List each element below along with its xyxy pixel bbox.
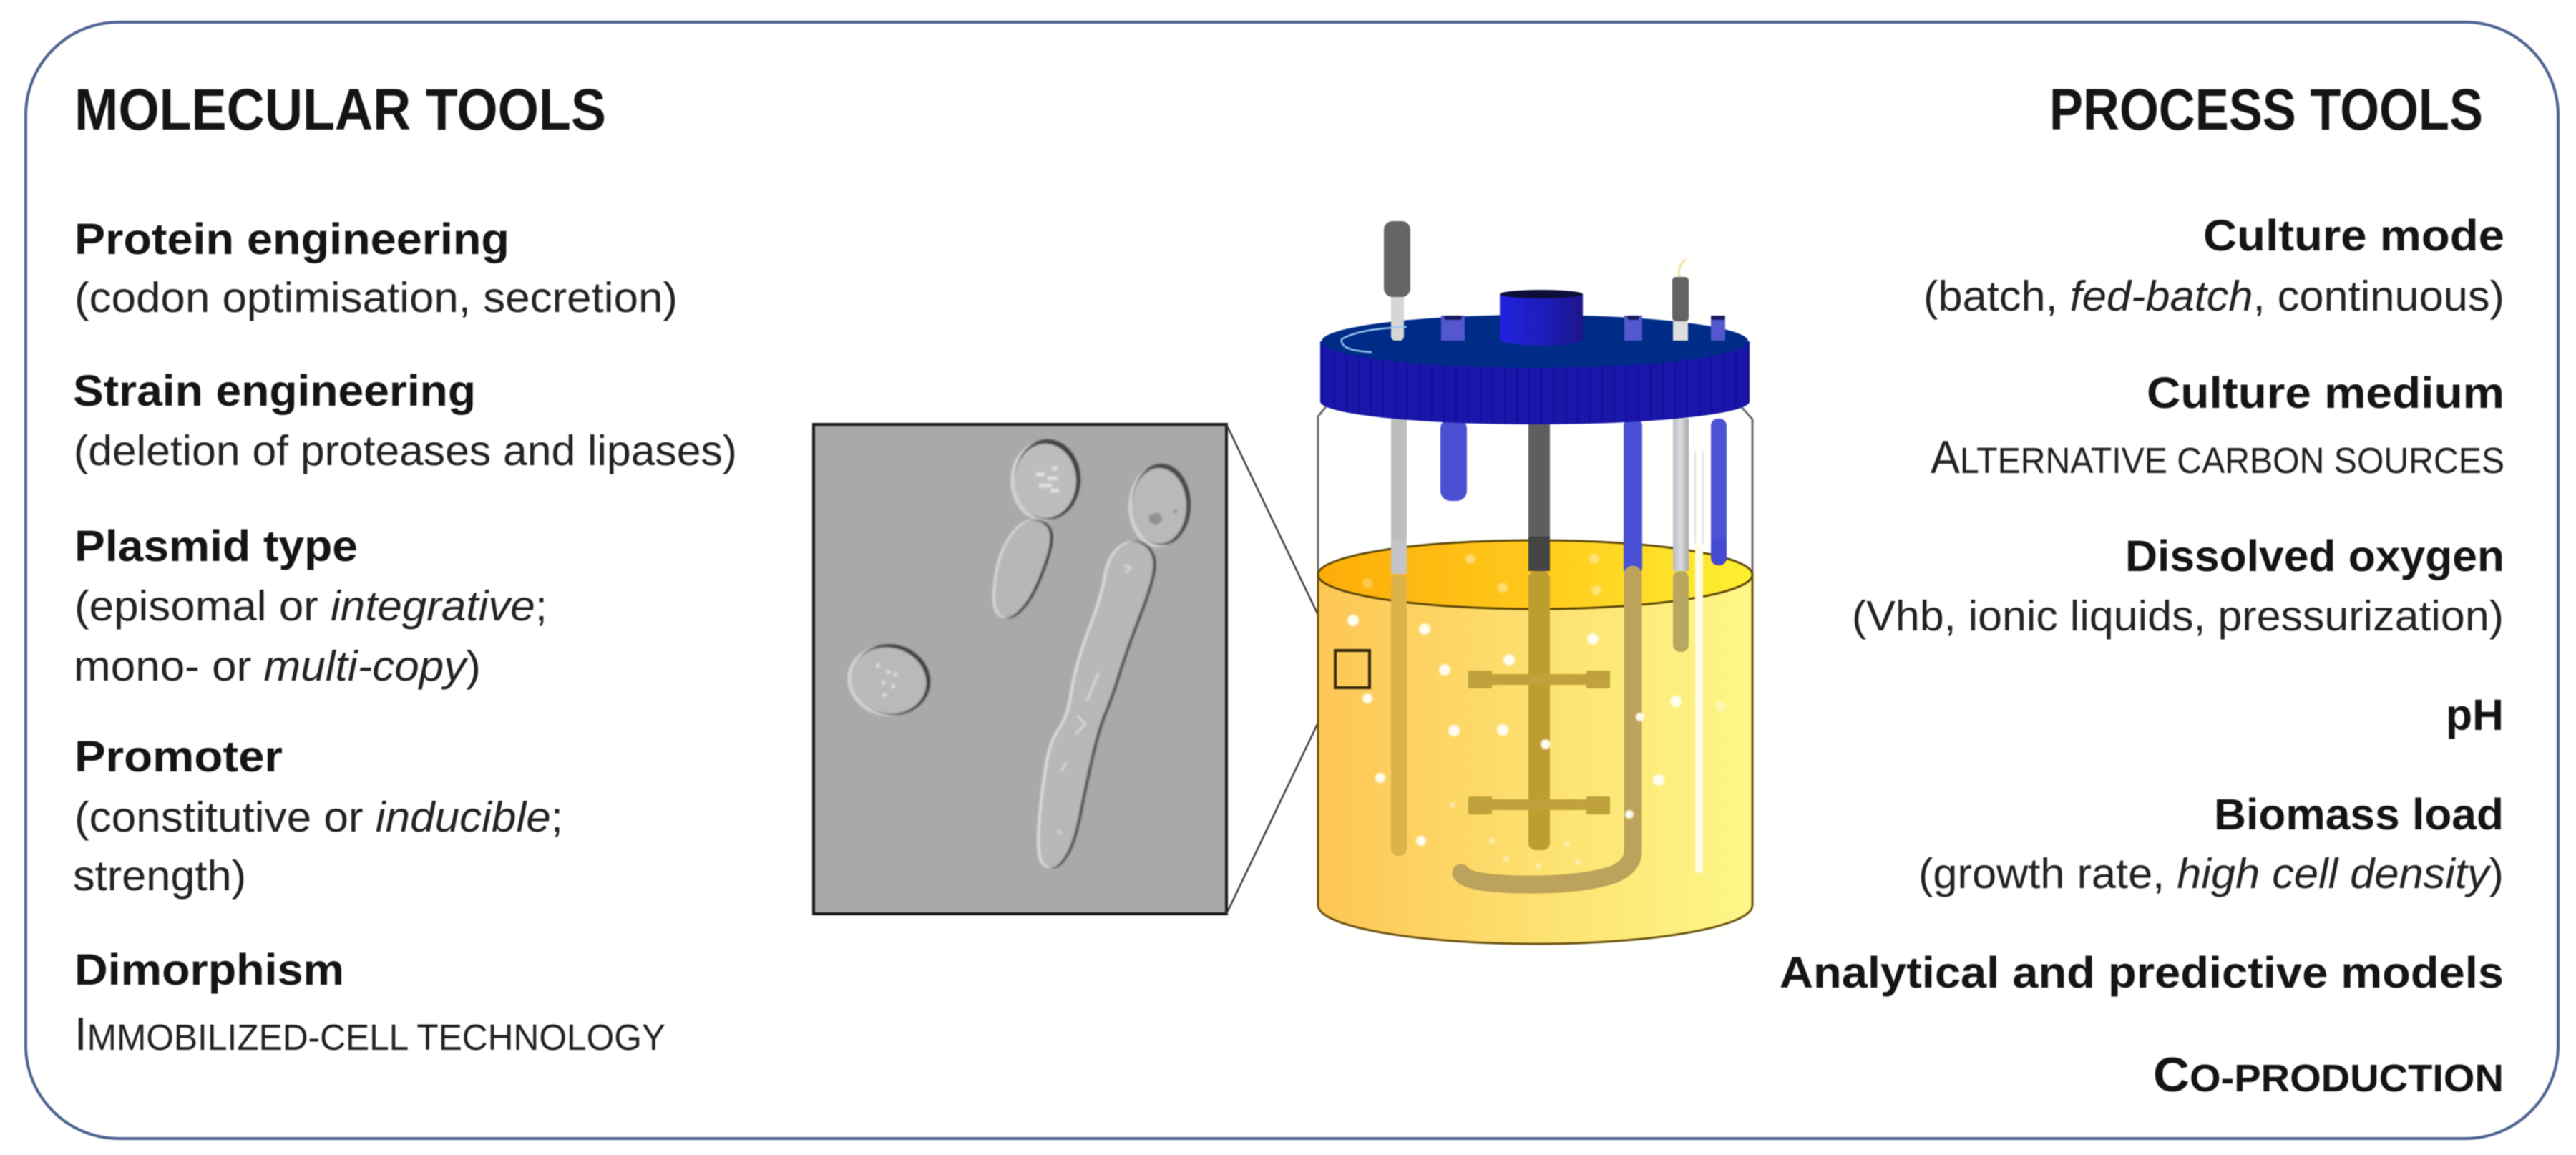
central stirrer housing xyxy=(1500,290,1583,346)
item: dissolved oxygen: (Vhb, ionic liquids, pressurization) xyxy=(1852,593,2504,640)
bioreactor illustration xyxy=(1318,221,1752,944)
liquid surface xyxy=(1318,540,1752,609)
item: plasmid type: Plasmid type xyxy=(74,522,358,570)
heading: molecular tools: MOLECULAR TOOLS xyxy=(74,77,606,142)
item: co-production: CO-PRODUCTION xyxy=(2153,1048,2504,1102)
item: culture mode xyxy=(1923,211,2504,320)
port xyxy=(1441,316,1465,341)
item: strain engineering: Strain engineering xyxy=(73,366,476,415)
item: strain engineering xyxy=(73,366,737,474)
item: pH: pH xyxy=(2446,691,2504,739)
item: biomass load xyxy=(1918,790,2504,897)
micrograph of yeast cells xyxy=(814,424,1226,914)
internal tubes above the liquid xyxy=(1391,419,1727,578)
item: promoter: (constitutive or inducible; xyxy=(74,794,563,841)
zoom connector lines xyxy=(1226,424,1335,914)
item: culture mode: Culture mode xyxy=(2203,211,2504,260)
item: plasmid type: (episomal or integrative; xyxy=(74,583,547,630)
item: plasmid type xyxy=(74,522,547,690)
item: protein engineering: Protein engineering xyxy=(74,215,509,263)
panel: molecular tools xyxy=(73,77,737,1060)
zoom inset marker xyxy=(1335,650,1370,688)
left probe xyxy=(1342,221,1410,352)
item: culture medium: ALTERNATIVE CARBON SOURCES xyxy=(1931,431,2504,483)
panel: process tools xyxy=(1780,77,2504,1102)
item: culture medium xyxy=(1931,369,2504,483)
item: culture medium: Culture medium xyxy=(2147,369,2504,417)
yeast cell: elongated bud xyxy=(994,522,1051,616)
top-mounted probes and ports xyxy=(1342,221,1725,352)
port xyxy=(1711,316,1725,341)
item: strain engineering: (deletion of proteases and lipases) xyxy=(74,427,737,474)
item: biomass load: Biomass load xyxy=(2214,790,2504,839)
item: dissolved oxygen xyxy=(1852,532,2504,640)
liquid culture body xyxy=(1318,575,1752,944)
item: analytical and predictive models: Analytical and predictive models xyxy=(1780,948,2504,997)
item: dimorphism: Dimorphism xyxy=(74,945,344,994)
air bubbles xyxy=(1347,554,1726,869)
item: dissolved oxygen: Dissolved oxygen xyxy=(2125,532,2504,580)
heading: process tools: PROCESS TOOLS xyxy=(2049,77,2483,142)
item: promoter: strength) xyxy=(73,852,246,900)
item: plasmid type: mono- or multi-copy) xyxy=(74,643,481,690)
right probe with wire xyxy=(1672,259,1689,341)
item: dimorphism xyxy=(74,945,665,1060)
item: promoter: Promoter xyxy=(74,732,283,781)
port xyxy=(1624,316,1642,341)
item: dimorphism: IMMOBILIZED-CELL TECHNOLOGY xyxy=(74,1008,665,1060)
yeast cell: budding mother cell xyxy=(1010,439,1080,521)
item: biomass load: (growth rate, high cell density ) xyxy=(1918,850,2504,897)
item: culture mode: (batch, fed-batch, continuous) xyxy=(1923,273,2504,320)
yeast cell: germinating mother cell xyxy=(1128,464,1191,547)
yeast cell: hypha xyxy=(1040,545,1153,864)
item: protein engineering xyxy=(74,215,678,321)
item: protein engineering: (codon optimisation, secretion) xyxy=(74,274,678,321)
yeast cell: single round cell xyxy=(840,636,938,724)
item: promoter xyxy=(73,732,563,900)
fermenter lid with knurled edge xyxy=(1320,315,1750,424)
glass vessel walls xyxy=(1318,405,1752,905)
submerged probes and impeller xyxy=(1391,538,1727,884)
